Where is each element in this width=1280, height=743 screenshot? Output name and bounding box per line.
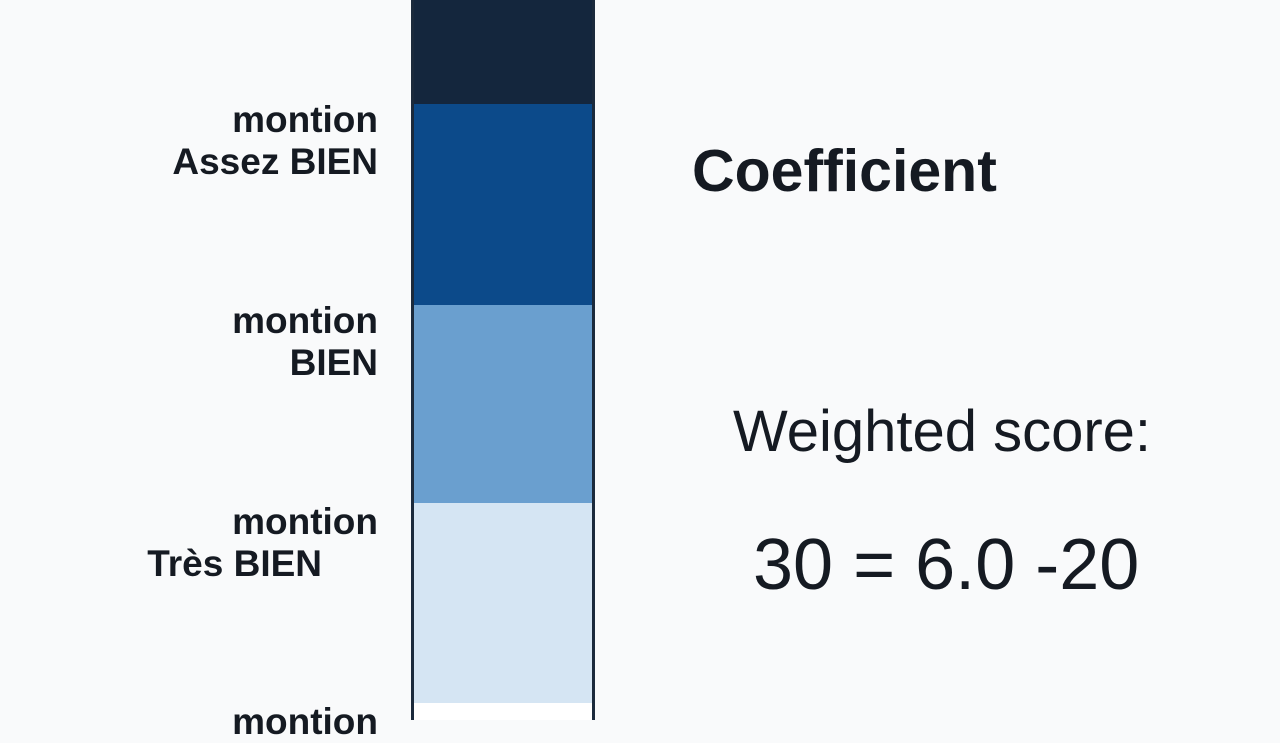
label: BIEN [232, 300, 378, 383]
label: Assez BIEN [172, 99, 378, 182]
label: montion (Très BIEN): montion [232, 501, 378, 542]
segment: light blue [414, 503, 592, 703]
label: bottom montion: montion [232, 701, 378, 742]
bar: mention scale [411, 0, 595, 720]
segment: dark navy [414, 0, 592, 104]
heading: Coefficient: Coefficient [692, 138, 997, 204]
text: Weighted score: Weighted score: [733, 399, 1151, 464]
segment: mid blue [414, 305, 592, 503]
label: BIEN: montion [232, 300, 378, 341]
label: BIEN: BIEN [290, 342, 378, 383]
label: Assez BIEN: Assez BIEN [172, 141, 378, 182]
label: Assez BIEN: montion [232, 99, 378, 140]
label: Très BIEN: Très BIEN [147, 543, 322, 584]
segment: blue [414, 104, 592, 305]
formula: 30 = 6.0 -20 [753, 525, 1139, 605]
